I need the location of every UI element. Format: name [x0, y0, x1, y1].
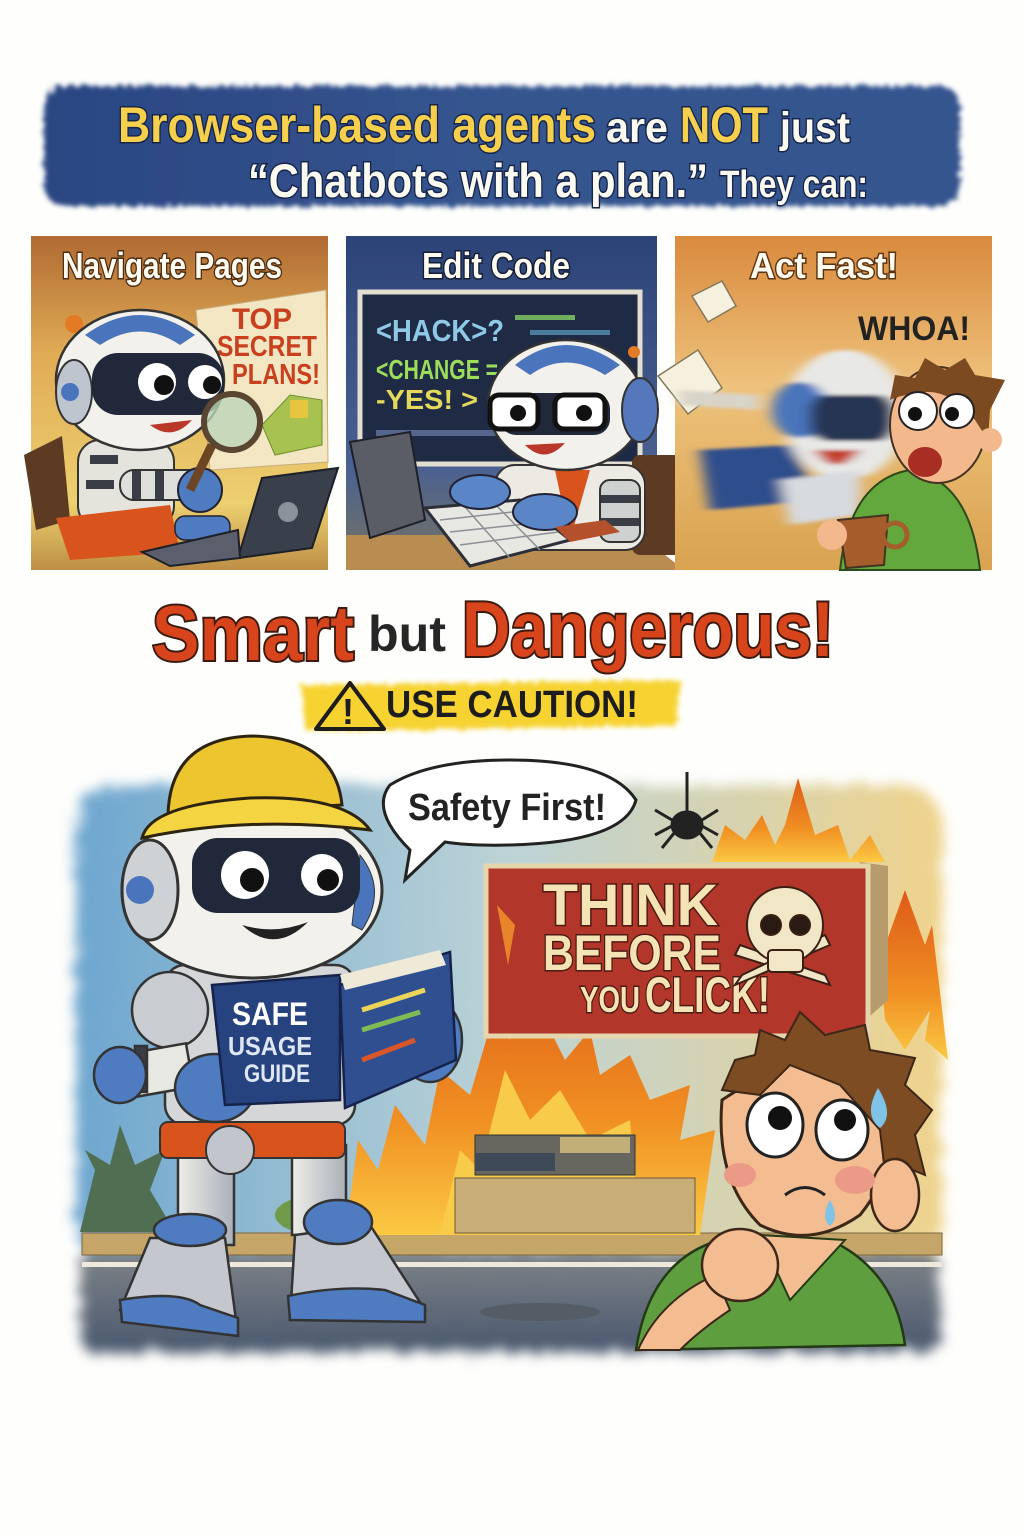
panel heading: Act Fast!: [750, 245, 898, 286]
bushes: [80, 1125, 480, 1236]
chair: [24, 436, 70, 530]
headline: smart but dangerous: [152, 585, 834, 677]
icon: spider: [655, 772, 718, 848]
banner heading: They can:: [720, 164, 868, 206]
motion blur robot: [680, 350, 907, 525]
side monitor: [350, 432, 425, 538]
banner heading: Browser-based agents: [118, 97, 596, 153]
robot: [488, 340, 658, 550]
whoa text: WHOA!: [858, 310, 970, 348]
sign text: THINK: [543, 873, 718, 938]
glasses: [490, 395, 605, 429]
scene background: [76, 785, 942, 1352]
sign: think before you click: BEFORE: [543, 925, 721, 981]
safe usage guide book: USAGE: [228, 1031, 312, 1061]
banner heading: NOT: [680, 97, 768, 153]
panel: navigate pages: [24, 236, 338, 570]
speech bubble: safety first: Safety First!: [408, 787, 606, 829]
panel: edit code: [346, 236, 688, 570]
hands: [450, 475, 577, 530]
panel heading: Navigate Pages: [62, 245, 282, 286]
headline: smart but dangerous: Dangerous!: [462, 585, 834, 673]
papers: [658, 281, 736, 414]
safe usage guide book: [212, 950, 456, 1108]
note: [555, 520, 620, 542]
poster: top secret plans: [196, 290, 328, 470]
arms: [94, 972, 462, 1122]
poster: top secret plans: SECRET: [217, 331, 317, 363]
sign: think before you click: [486, 862, 888, 1036]
banner heading: just: [779, 104, 850, 152]
icon: warning triangle: !: [342, 691, 354, 732]
caution banner: [300, 680, 680, 732]
keyboard: [425, 500, 570, 566]
robot: [56, 310, 230, 560]
headline: smart but dangerous: but: [368, 606, 446, 662]
banner heading: “Chatbots with a plan.”: [248, 154, 708, 207]
poster: top secret plans: TOP: [232, 303, 292, 336]
code monitor: -YES! >: [376, 384, 478, 415]
flames: [345, 778, 948, 1235]
icon: magnifying glass: [190, 394, 260, 490]
sign: think before you click: YOU: [580, 979, 640, 1020]
icon: skull: [735, 887, 830, 985]
panel: main scene: [76, 736, 948, 1352]
panel: act fast: [658, 236, 1005, 570]
caution text: USE CAUTION!: [386, 684, 638, 726]
laptop: [142, 468, 338, 566]
chair: [632, 455, 688, 555]
poster: top secret plans: PLANS!: [232, 359, 320, 391]
code monitor: [360, 292, 640, 464]
headline: smart but dangerous: Smart: [152, 589, 354, 677]
hard hat: [142, 736, 370, 838]
worried man: [636, 1012, 932, 1350]
banner: [44, 86, 960, 207]
banner heading: [118, 97, 868, 207]
wall and road: [82, 1233, 942, 1321]
coffee mug: [817, 515, 907, 568]
stone steps: [455, 1135, 695, 1233]
desk: [346, 535, 684, 570]
torso: [165, 965, 355, 1125]
sign: think before you click: CLICK!: [645, 967, 770, 1023]
code monitor: <CHANGE =: [376, 354, 498, 385]
legs and boots: [120, 1145, 425, 1336]
book cover text: SAFE: [232, 996, 308, 1032]
panel heading: Edit Code: [422, 245, 570, 286]
big robot: [94, 736, 462, 1336]
surprised man: [840, 358, 1005, 570]
code monitor: <HACK>?: [376, 313, 504, 348]
banner heading: are: [606, 104, 668, 152]
head: [122, 802, 382, 978]
safe usage guide book: GUIDE: [244, 1060, 310, 1088]
icon: warning triangle: [316, 683, 384, 732]
speech bubble: safety first: [383, 760, 636, 880]
